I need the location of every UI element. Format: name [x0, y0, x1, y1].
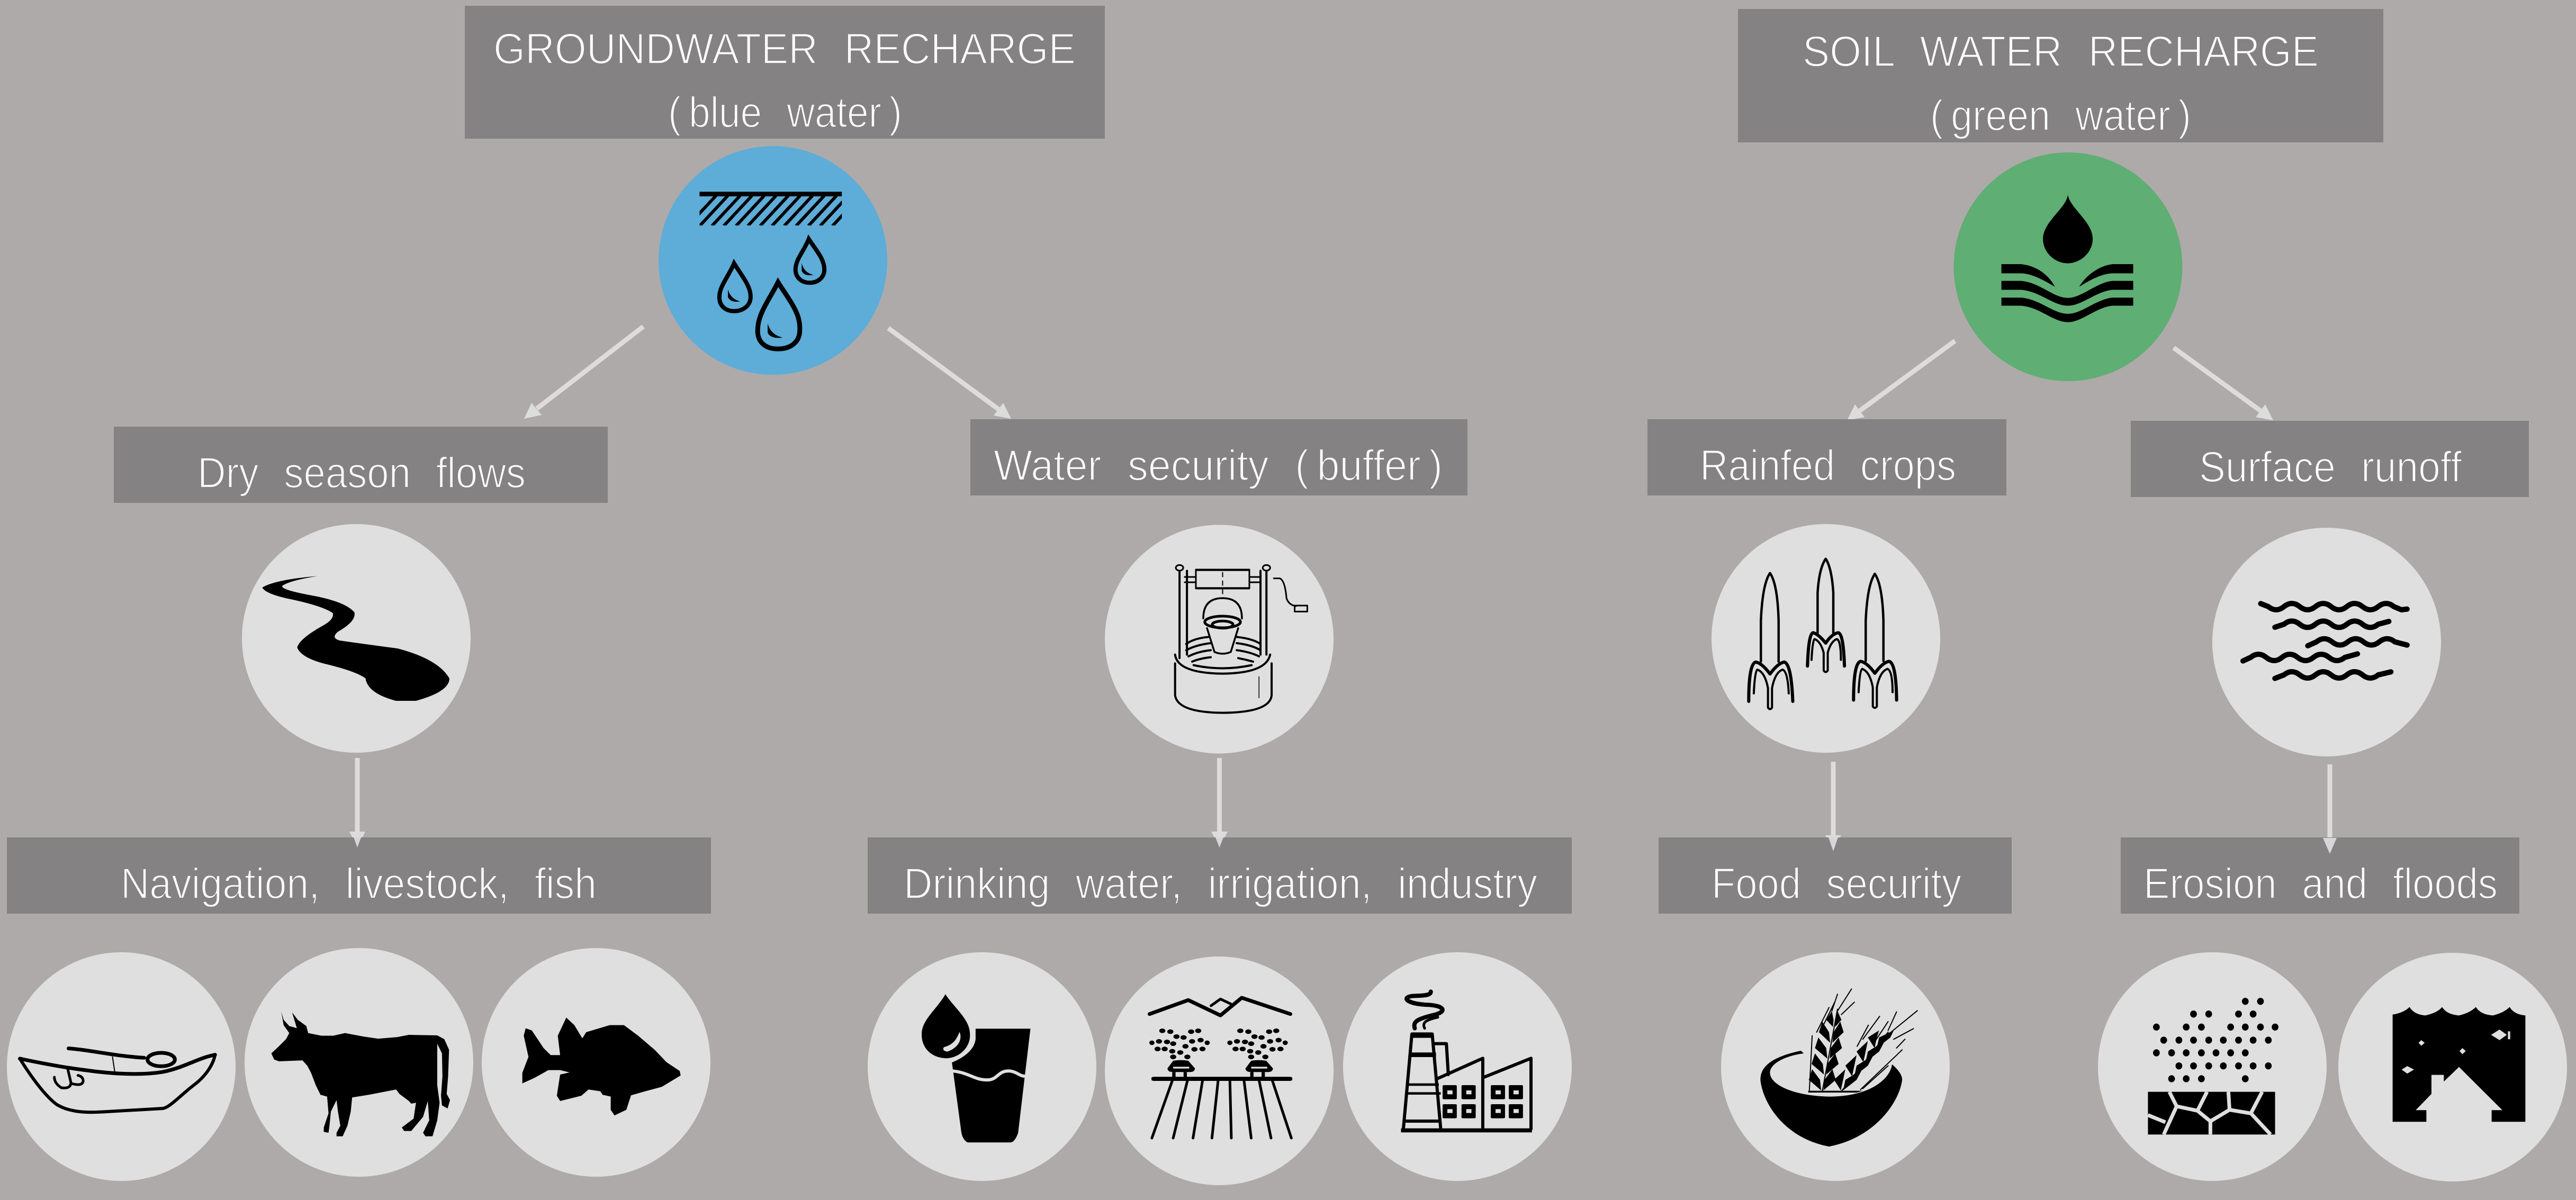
arrow: groundwater to water security [888, 328, 1011, 419]
icon: wishing well [1105, 525, 1334, 754]
panel: soil water recharge heading: ( green water ) [1930, 92, 2191, 140]
icon: surface runoff waves [2212, 528, 2441, 756]
icon: maize plants [1712, 524, 1940, 753]
arrow heads over use labels [354, 837, 2337, 854]
icon: glass of water [868, 952, 1096, 1181]
icon: factory [1343, 952, 1572, 1181]
arrow: water security to uses [1211, 758, 1228, 847]
arrow: rainfed crops to food security [1825, 762, 1841, 851]
label: drinking water, irrigation, industry: Drinking water, irrigation, industry [904, 860, 1537, 908]
icon: soil erosion [2098, 952, 2327, 1181]
label: navigation, livestock, fish [7, 837, 711, 914]
icon: blue water circle with drops [659, 146, 887, 375]
icon: cow [245, 948, 473, 1177]
icon: bowl of grain [1721, 952, 1950, 1181]
icon: river [242, 524, 471, 753]
arrow: surface runoff to erosion and floods [2322, 764, 2338, 854]
label: rainfed crops: Rainfed crops [1700, 441, 1956, 490]
label: rainfed crops [1647, 419, 2006, 495]
label: surface runoff: Surface runoff [2199, 443, 2462, 491]
icon: boat [7, 952, 236, 1181]
panel: soil water recharge heading: SOIL WATER RECHARGE [1803, 28, 2319, 76]
icon: fish [482, 948, 710, 1177]
label: surface runoff [2131, 421, 2529, 497]
panel: groundwater recharge heading: ( blue water ) [668, 88, 902, 137]
label: dry season flows [114, 427, 608, 503]
panel: groundwater recharge heading [465, 6, 1105, 139]
label: navigation, livestock, fish: Navigation, livestock, fish [121, 860, 597, 908]
panel: soil water recharge heading [1738, 9, 2383, 142]
icon: green water circle with drop and waves [1953, 152, 2182, 381]
label: erosion and floods [2121, 837, 2519, 914]
label: water security (buffer) [970, 419, 1467, 495]
arrow: soil water to rainfed crops [1847, 341, 1955, 420]
label: erosion and floods: Erosion and floods [2143, 860, 2498, 908]
label: food security: Food security [1712, 860, 1961, 908]
arrow: groundwater to dry season flows [524, 327, 643, 419]
label: food security [1659, 837, 2012, 914]
panel: groundwater recharge heading: GROUNDWATER RECHARGE [493, 25, 1076, 73]
label: drinking water, irrigation, industry [868, 837, 1572, 914]
label: dry season flows: Dry season flows [197, 449, 526, 497]
arrow: dry season flows to uses [349, 758, 365, 847]
icon: flooded house [2338, 953, 2567, 1181]
arrow: soil water to surface runoff [2174, 348, 2273, 420]
icon: sprinkler irrigation [1105, 957, 1334, 1185]
label: water security (buffer): Water security ( buffer ) [994, 441, 1443, 490]
